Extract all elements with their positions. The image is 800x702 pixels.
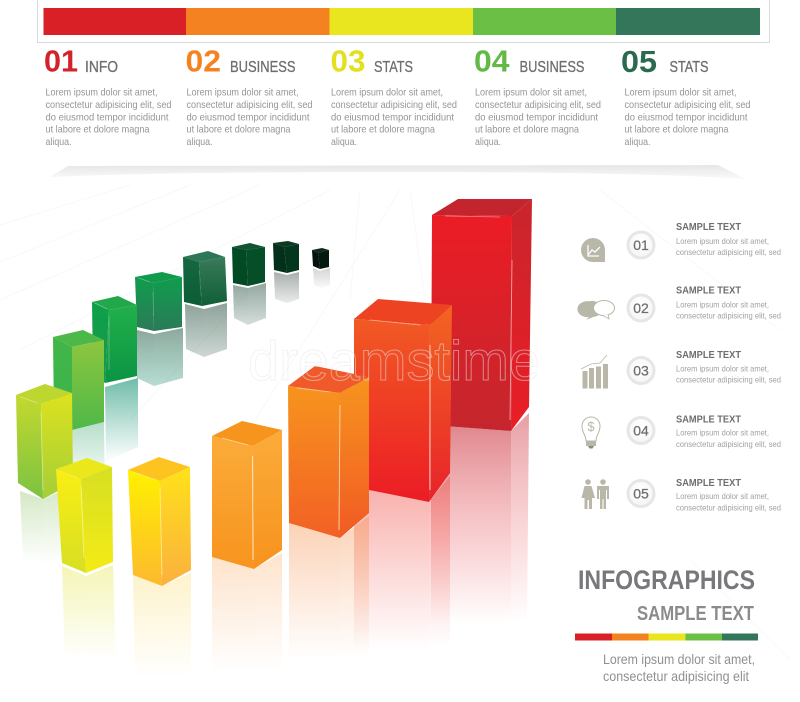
column 02: business: ut labore et dolore magna: [186, 124, 291, 136]
column 05: stats: consectetur adipisicing elit, sed: [624, 100, 751, 111]
column 03: stats: 03: [330, 44, 366, 78]
column 01: info: 01: [44, 44, 78, 78]
column 04: business: consectetur adipisicing elit, sed: [475, 100, 601, 111]
bottom title block: SAMPLE TEXT: [637, 603, 754, 625]
list item 05: 05: [633, 486, 649, 502]
column 01: info: Lorem ipsum dolor sit amet,: [46, 88, 158, 98]
column 05: stats: Lorem ipsum dolor sit amet,: [624, 88, 736, 98]
column 04: business: 04: [474, 44, 510, 78]
divider shadow band: [50, 165, 745, 179]
column 02: business: BUSINESS: [230, 59, 296, 76]
column 01: info: INFO: [85, 59, 118, 76]
watermark: dreamstime: [248, 329, 540, 392]
list item 01: consectetur adipisicing elit, sed: [676, 247, 781, 257]
column 03: stats: [330, 44, 457, 148]
list item 02: [577, 286, 781, 321]
icon: rising bars: [581, 355, 608, 388]
list item 01: SAMPLE TEXT: [676, 222, 742, 233]
list item 03: [581, 350, 781, 388]
bar 11: deep green: [183, 251, 227, 306]
column 05: stats: [621, 45, 751, 148]
bar 12: dark green: [232, 243, 265, 286]
column 05: stats: ut labore et dolore magna: [624, 124, 729, 136]
bar 10: green: [135, 272, 182, 331]
list item 03: Lorem ipsum dolor sit amet,: [676, 364, 769, 374]
column 02: business: Lorem ipsum dolor sit amet,: [186, 88, 298, 98]
column 01: info: do eiusmod tempor incididunt: [46, 112, 169, 124]
list item 03: 03: [633, 362, 649, 378]
bottom title block: Lorem ipsum dolor sit amet,: [603, 652, 755, 667]
column 01: info: ut labore et dolore magna: [46, 124, 150, 136]
bar 2: orange red: [354, 299, 452, 502]
list item 02: 02: [633, 300, 649, 316]
column 03: stats: do eiusmod tempor incididunt: [331, 112, 454, 124]
bar 6: yellow: [56, 458, 113, 573]
column 04: business: ut labore et dolore magna: [475, 124, 579, 136]
list item 03: consectetur adipisicing elit, sed: [676, 374, 781, 384]
mini colour bar: [575, 634, 758, 640]
column 04: business: do eiusmod tempor incididunt: [475, 112, 598, 124]
column 05: stats: 05: [621, 45, 657, 79]
list item 02: SAMPLE TEXT: [676, 286, 742, 296]
list item 01: [581, 222, 781, 262]
column 05: stats: STATS: [670, 59, 708, 76]
column 02: business: do eiusmod tempor incididunt: [186, 112, 310, 124]
column 04: business: aliqua.: [475, 137, 501, 148]
column 02: business: 02: [186, 44, 221, 78]
icon: speech bubbles: [577, 300, 614, 320]
column 04: business: Lorem ipsum dolor sit amet,: [475, 88, 587, 98]
list item 02: consectetur adipisicing elit, sed: [676, 310, 781, 320]
bar 7: yellow green: [16, 384, 73, 499]
column 03: stats: ut labore et dolore magna: [331, 124, 435, 136]
list item 04: SAMPLE TEXT: [676, 414, 742, 426]
bar 3: orange: [288, 366, 369, 538]
bottom title block: [575, 565, 758, 684]
list item 04: consectetur adipisicing elit, sed: [676, 439, 781, 449]
list item 04: [582, 414, 781, 449]
list item 04: Lorem ipsum dolor sit amet,: [676, 428, 769, 438]
column 03: stats: STATS: [374, 59, 413, 76]
list item 04: 04: [633, 422, 649, 438]
list item 01: 01: [633, 237, 649, 253]
bottom title block: consectetur adipisicing elit: [603, 669, 749, 684]
column 04: business: [474, 44, 601, 148]
bar 1: tall red: [431, 199, 532, 431]
bar 9: bright green: [92, 296, 137, 383]
column 01: info: [44, 44, 172, 148]
list item 05: Lorem ipsum dolor sit amet,: [676, 491, 769, 501]
bar 14: near black: [312, 248, 329, 269]
icon: chart bubble: [581, 238, 605, 262]
list item 05: [582, 478, 781, 512]
bar 4: light orange: [212, 421, 282, 569]
list item 05: SAMPLE TEXT: [676, 478, 742, 489]
list item 02: Lorem ipsum dolor sit amet,: [676, 300, 769, 310]
list item 03: SAMPLE TEXT: [676, 350, 742, 361]
top colour bar panel: [38, 0, 770, 42]
column 03: stats: aliqua.: [331, 137, 357, 148]
bottom title block: INFOGRAPHICS: [578, 565, 755, 595]
bar 8: mid green: [53, 330, 104, 430]
bar 13: darkest green: [273, 241, 299, 273]
icon: light bulb: $: [587, 419, 595, 434]
list item 01: Lorem ipsum dolor sit amet,: [676, 236, 769, 246]
column 02: business: consectetur adipisicing elit, sed: [186, 100, 313, 111]
column 05: stats: aliqua.: [624, 137, 650, 148]
column 03: stats: Lorem ipsum dolor sit amet,: [331, 88, 443, 98]
bar reflections: [20, 268, 529, 692]
column 05: stats: do eiusmod tempor incididunt: [624, 112, 748, 124]
column 03: stats: consectetur adipisicing elit, sed: [331, 100, 457, 111]
perspective floor lines: [0, 185, 790, 660]
bar 5: yellow orange: [128, 457, 191, 586]
column 01: info: aliqua.: [46, 137, 72, 148]
column 04: business: BUSINESS: [520, 59, 584, 76]
column 01: info: consectetur adipisicing elit, sed: [46, 100, 172, 111]
icon: woman and man: [582, 479, 609, 509]
list item 05: consectetur adipisicing elit, sed: [676, 502, 781, 512]
icon: light bulb: [582, 417, 600, 448]
column 02: business: [186, 44, 313, 148]
column 02: business: aliqua.: [186, 137, 212, 148]
